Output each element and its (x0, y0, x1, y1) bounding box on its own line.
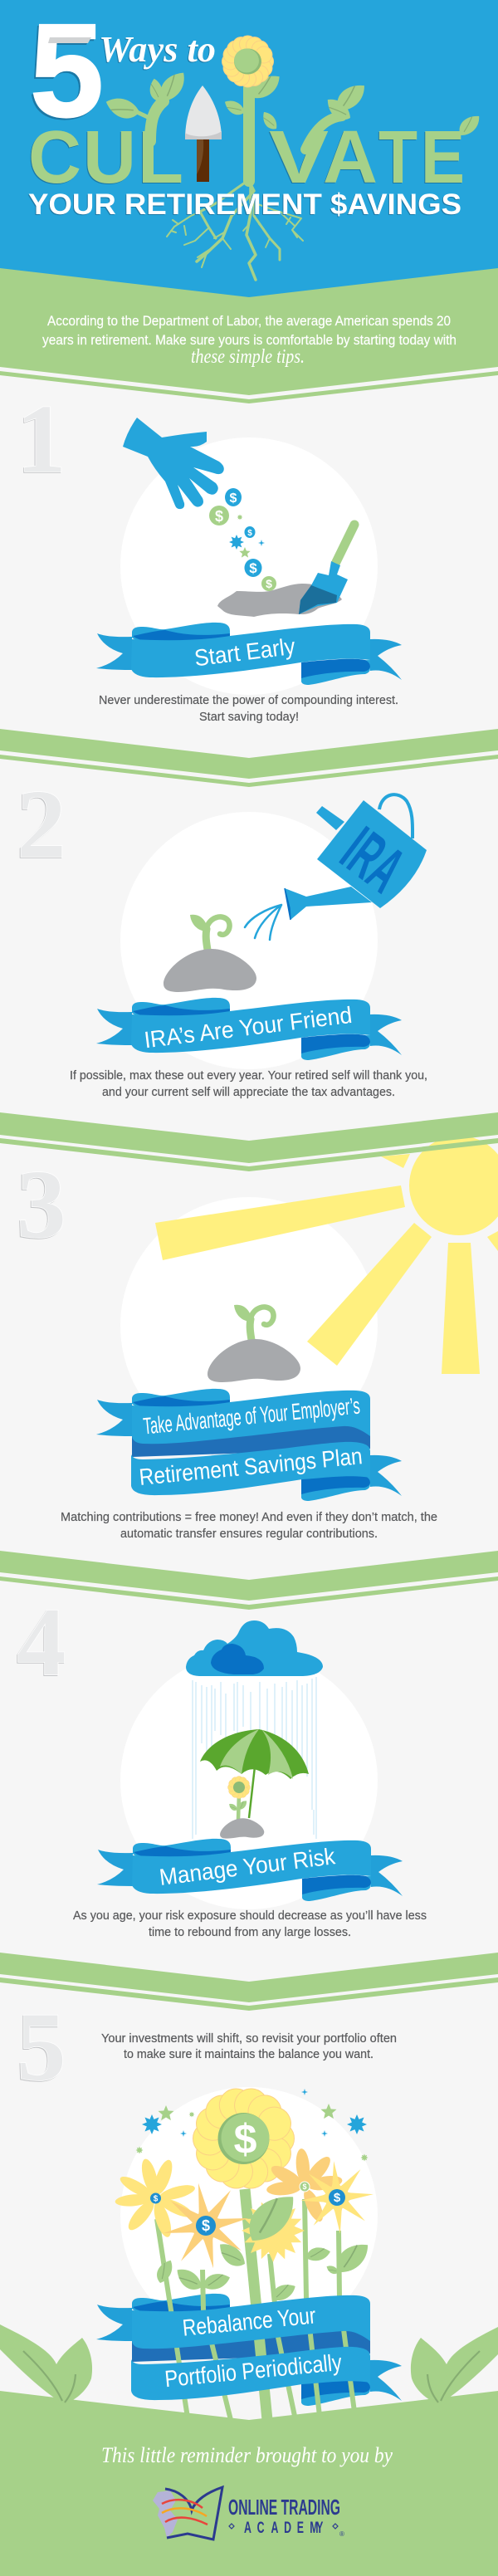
panel: footer green (0, 2391, 498, 2576)
text block: step 2: If possible, max these out every year. Your retired self will thank you, (70, 1068, 427, 1083)
number 3: 3 (17, 1150, 66, 1259)
icon: plant roots (167, 181, 303, 280)
text block: step 4: time to rebound from any large losses. (149, 1925, 351, 1939)
ribbon: IRA's Are Your Friend: IRA’s Are Your Friend (143, 1002, 354, 1053)
icon: coins and sparkles: $ (215, 508, 223, 525)
ribbon: IRA's Are Your Friend (96, 998, 402, 1060)
logo wordmark: ONLINE TRADING (228, 2495, 340, 2520)
chevron stripe: intro (0, 371, 498, 403)
icon: coins and sparkles: $ (230, 491, 237, 506)
ribbon: Take Advantage / Retirement Savings Plan: Take Advantage of Your Employer’s (142, 1393, 361, 1440)
icon: rain (193, 1677, 316, 1839)
text block: step 5: to make sure it maintains the balance you want. (124, 2047, 374, 2061)
logo: Online Trading Academy: ® (339, 2530, 344, 2538)
number 4: 4 (17, 1587, 66, 1696)
icon: water streams (245, 905, 281, 940)
icon: large sunflower with dollar: $ (234, 2116, 257, 2163)
white circle: step 3 (120, 1197, 378, 1454)
chevron band: step 3 (0, 1112, 498, 1163)
icon: sparkle stars (136, 2089, 369, 2162)
icon: right corner leaves (411, 2324, 498, 2404)
title illustration: sunflower plant and word Cultivate (28, 116, 465, 199)
chevron band: step 2 (0, 729, 498, 779)
text: IRA on can: IRA (329, 813, 418, 907)
logo swooshes (162, 2500, 208, 2525)
chevron stripe: step 4 (0, 1576, 498, 1610)
icon: left corner leaves (0, 2324, 92, 2404)
text block: intro: years in retirement. Make sure yours is comfortable by starting today with (42, 332, 456, 348)
icon: garden trowel in title (185, 86, 222, 182)
chevron band: step 5 (0, 1953, 498, 2002)
icon: coins and sparkles: $ (266, 577, 272, 590)
icon: orange star flower: $ (202, 2217, 210, 2234)
word: CUL: C (28, 116, 81, 199)
icon: storm cloud (186, 1620, 323, 1676)
white circle: step 2 (120, 812, 378, 1069)
text: these simple tips: these simple tips. (191, 346, 305, 368)
chevron band: step 4 (0, 1551, 498, 1601)
text block: intro: According to the Department of Labor, the average American spends 20 (47, 313, 451, 329)
icon: small flower on mound (220, 1776, 264, 1839)
icon: blue hand (123, 418, 224, 509)
icon: coins and sparkles: $ (249, 560, 257, 576)
logo: Online Trading Academy (153, 2487, 344, 2539)
word: VATE: T (378, 116, 417, 199)
ribbon: Start Early: Start Early (193, 633, 296, 671)
panel: header blue background (0, 0, 498, 303)
text block: step 3: automatic transfer ensures regular contributions. (120, 1527, 378, 1541)
icon: dirt patch (217, 584, 342, 617)
ribbon: Manage Your Risk: Manage Your Risk (158, 1843, 337, 1890)
text block: step 1: Start saving today! (199, 710, 299, 724)
heading: big 5: 5 (30, 0, 104, 144)
icon: mid flower behind (233, 2191, 313, 2270)
icon: flower leaves (154, 2185, 374, 2305)
word: CUL (28, 116, 183, 199)
icon: leaves on letters (103, 66, 483, 139)
text block: step 4: As you age, your risk exposure should decrease as you’ll have less (73, 1909, 427, 1923)
chevron band: intro (0, 268, 498, 395)
number 5: 5 (17, 1992, 66, 2101)
text block: intro (42, 313, 456, 348)
ribbon front: Rebalance Your Portfolio Periodically: Rebalance Your (181, 2302, 317, 2341)
number 2: 2 (17, 770, 66, 878)
ribbon: Take Advantage / Retirement Savings Plan (96, 1389, 402, 1501)
word: VATE: E (421, 116, 465, 199)
text block: step 1: Never underestimate the power of compounding interest. (99, 693, 398, 707)
ribbon back: Rebalance (96, 2294, 402, 2406)
heading: Your Retirement $avings: YOUR RETIREMENT $AVINGS (28, 188, 461, 221)
icon: orange star flower (156, 2176, 256, 2275)
word: VATE (269, 116, 465, 199)
icon: sun (155, 1136, 498, 1374)
icon: left petal flower: $ (154, 2195, 159, 2203)
icon: sprout on mound (164, 915, 256, 992)
icon: coins and sparkles: $ (247, 529, 252, 538)
text block: step 1 (99, 693, 398, 724)
text block: step 5 (101, 2031, 397, 2061)
logo book (165, 2487, 222, 2539)
ribbon: Manage Your Risk (97, 1839, 403, 1901)
ribbon front: Rebalance Your Portfolio Periodically: Portfolio Periodically (164, 2349, 343, 2392)
logo globe (153, 2490, 178, 2538)
text block: step 2: and your current self will appreciate the tax advantages. (102, 1085, 395, 1099)
icon: left petal flower (115, 2158, 197, 2239)
text block: step 4 (73, 1909, 427, 1939)
text block: step 2 (70, 1068, 427, 1099)
icon: large sunflower with dollar (191, 2085, 296, 2192)
icon: right orange flower (266, 2148, 344, 2224)
icon: right yellow star flower (297, 2158, 377, 2237)
ribbon: Take Advantage / Retirement Savings Plan: Retirement Savings Plan (138, 1443, 364, 1490)
text: reminder line: This little reminder brought to you by (101, 2443, 393, 2467)
icon: plant stems growing from letters (137, 87, 342, 181)
number 1: 1 (17, 384, 66, 493)
white circle: step 5 (120, 2087, 378, 2344)
chevron stripe: step 5 (0, 1977, 498, 2011)
icon: coins and sparkles (209, 488, 276, 591)
word: VATE: V (269, 116, 329, 199)
text block: step 3 (61, 1510, 437, 1541)
word: CUL: L (138, 116, 183, 199)
word: VATE: A (323, 116, 378, 199)
icon: right yellow star flower: $ (334, 2191, 341, 2205)
icon: flower stems (157, 2189, 354, 2420)
logo: Online Trading Academy: ACADEMY (244, 2519, 324, 2537)
chevron stripe: step 2 (0, 755, 498, 787)
icon: right orange flower: $ (302, 2183, 307, 2191)
white circle: step 4 (120, 1652, 378, 1909)
ribbon front: Rebalance Your Portfolio Periodically (131, 2295, 370, 2400)
white circle: step 1 (120, 437, 378, 695)
ribbon: Start Early (96, 623, 402, 685)
chevron stripe: step 3 (0, 1138, 498, 1171)
heading: Ways to: Ways to (99, 29, 216, 70)
word: CUL: U (83, 116, 136, 199)
icon: title sunflower (221, 35, 275, 88)
icon: watering can (285, 794, 427, 920)
icon: shovel (299, 525, 354, 614)
icon: sprout on mound in sun (208, 1305, 300, 1382)
icon: umbrella (200, 1729, 309, 1818)
text block: step 5: Your investments will shift, so revisit your portfolio often (101, 2031, 397, 2046)
text block: step 3: Matching contributions = free money! And even if they don’t match, the (61, 1510, 437, 1524)
